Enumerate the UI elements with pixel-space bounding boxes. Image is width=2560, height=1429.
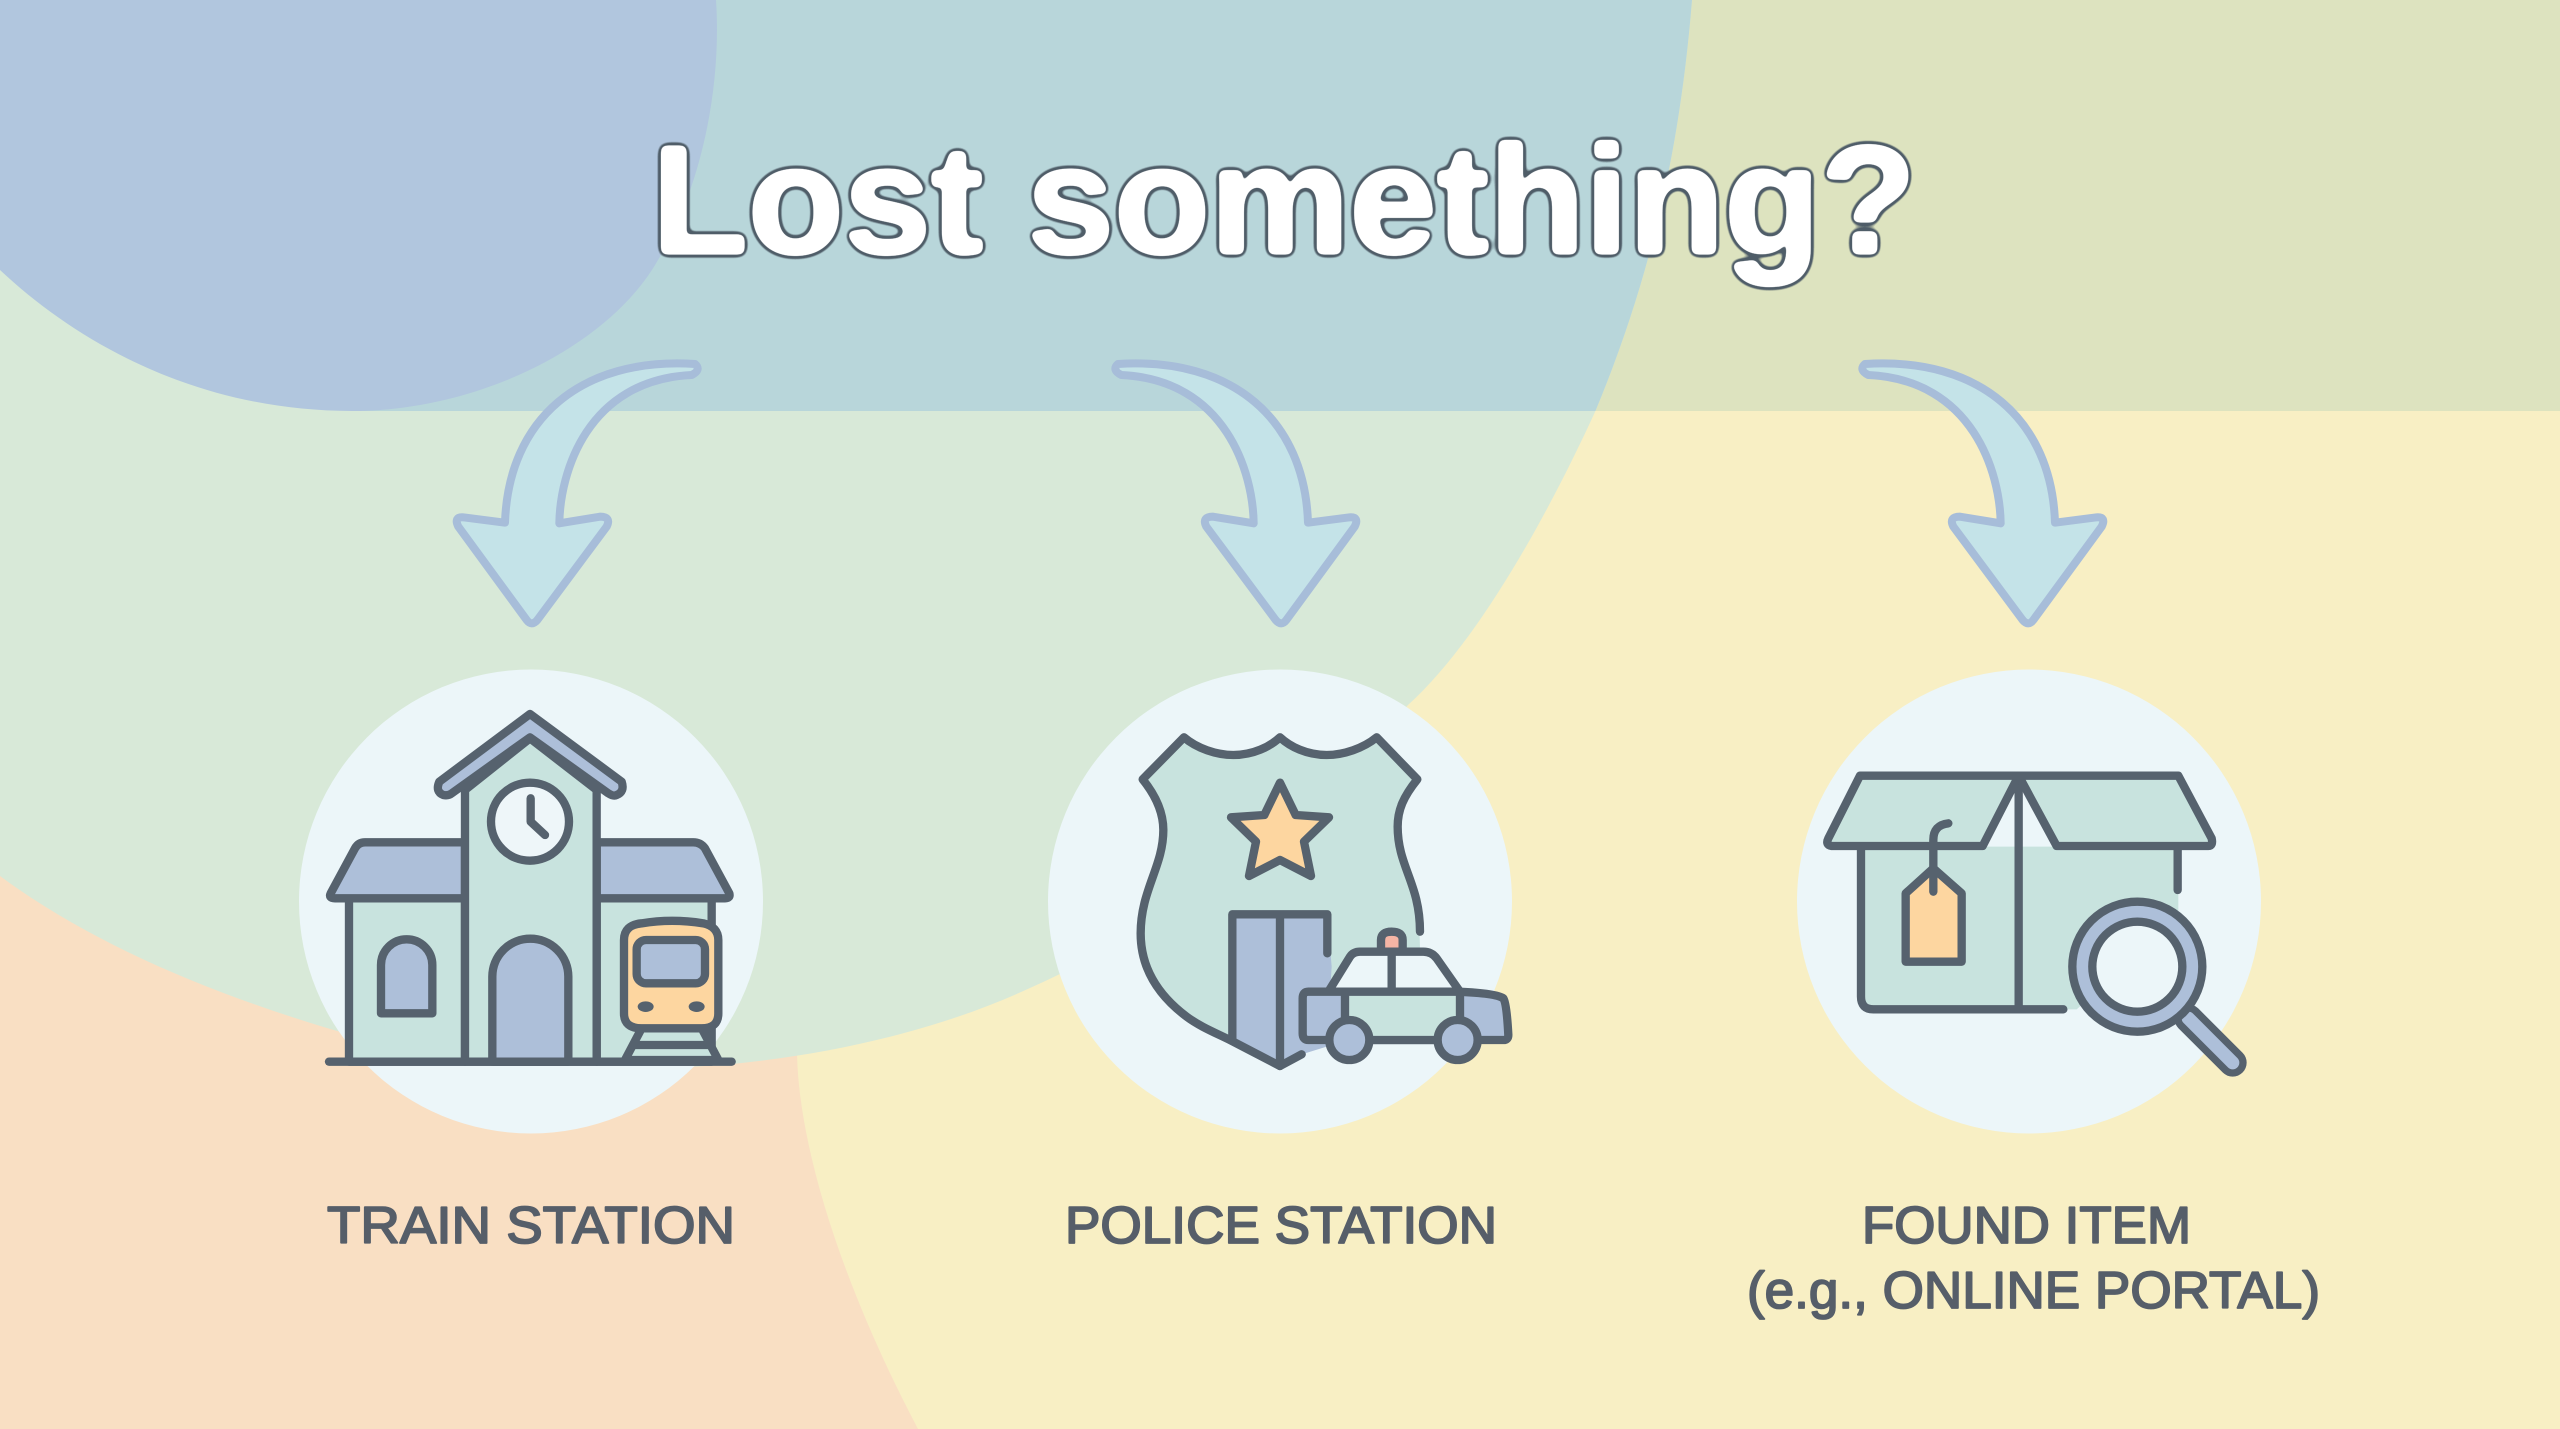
label: train station: TRAIN STATION [327, 1197, 735, 1255]
icon: police shield and car [1141, 737, 1508, 1066]
icon backdrop circle: found item [1797, 670, 2261, 1134]
label: found item [1747, 1197, 2320, 1320]
arrow: to train station [457, 363, 698, 623]
panel: train station [299, 670, 763, 1255]
label: found item: (e.g., ONLINE PORTAL) [1747, 1262, 2320, 1320]
icon: box with tag and magnifier [1827, 776, 2233, 1063]
arrow: to police station [1115, 363, 1356, 623]
label: police station: POLICE STATION [1065, 1197, 1497, 1255]
icon backdrop circle: police station [1048, 670, 1512, 1134]
label: found item: FOUND ITEM [1862, 1197, 2191, 1255]
icon backdrop circle: train station [299, 670, 763, 1134]
arrow: to found item [1862, 363, 2103, 623]
panel: found item [1747, 670, 2320, 1320]
panel: police station [1048, 670, 1512, 1255]
title: Lost something? [652, 114, 1916, 286]
icon: train station building [329, 714, 732, 1062]
